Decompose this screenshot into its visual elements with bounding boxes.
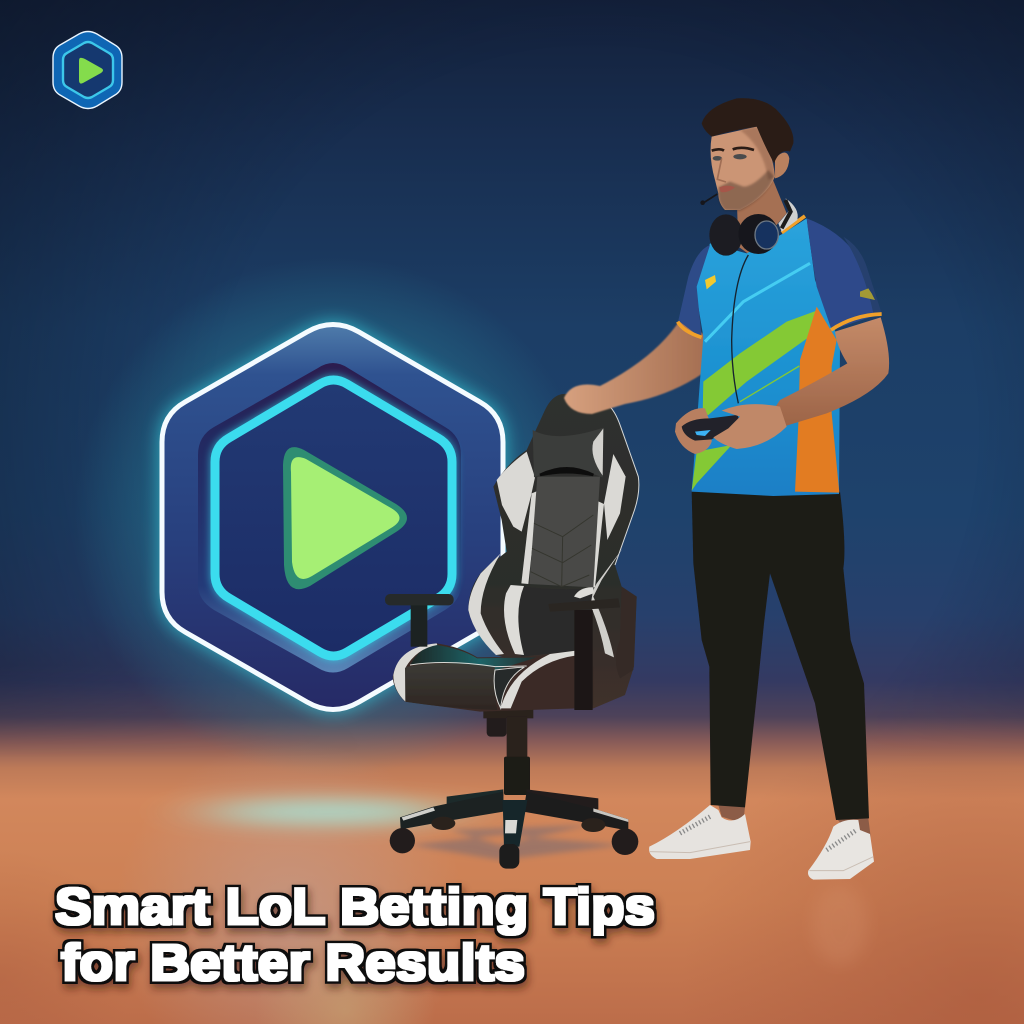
man upper body (675, 98, 889, 496)
earphone cable (732, 255, 748, 403)
icon: logo play triangle (79, 58, 103, 84)
man extended arm and hand on chair (564, 320, 705, 414)
orange cuffs and collar (678, 216, 882, 337)
title: Smart LoL Betting Tips (55, 878, 655, 935)
black trousers (692, 492, 869, 820)
neon hexagon play badge (162, 324, 503, 710)
head (702, 98, 793, 211)
gaming chair (385, 394, 639, 869)
right hand (713, 404, 787, 449)
right sneaker (808, 820, 874, 880)
navy sleeves (678, 245, 710, 338)
chair base and wheels (390, 708, 638, 869)
headset and microphone (700, 194, 798, 256)
man legs and sneakers (649, 492, 874, 880)
left sneaker (649, 805, 751, 859)
floor reflection of neon badge (205, 800, 455, 824)
white side bolsters (468, 452, 626, 657)
ankles (718, 805, 871, 837)
floor shadows under chair (410, 825, 625, 860)
logo badge (53, 32, 122, 108)
title (55, 878, 655, 991)
seat cushion (393, 643, 593, 712)
left armrest (385, 594, 454, 647)
chair centre panel with chevrons (529, 477, 600, 587)
bare arm (767, 317, 889, 427)
piping on back edge (607, 403, 639, 565)
shoe reflection (812, 885, 868, 965)
jersey logo (705, 275, 716, 289)
chair back shell (468, 394, 639, 710)
cyan neon ring (215, 380, 452, 656)
headrest (533, 428, 603, 477)
left hand (675, 408, 712, 454)
right armrest and bracket (548, 587, 637, 710)
neck (737, 177, 787, 255)
cyan stripe (705, 263, 810, 342)
title: for Better Results (61, 934, 525, 991)
orange side panel (795, 307, 839, 493)
green stripe (703, 311, 816, 415)
icon: green play triangle (283, 447, 407, 589)
jersey body (692, 218, 840, 496)
lumbar pillow (504, 585, 593, 657)
game controller (682, 415, 739, 441)
